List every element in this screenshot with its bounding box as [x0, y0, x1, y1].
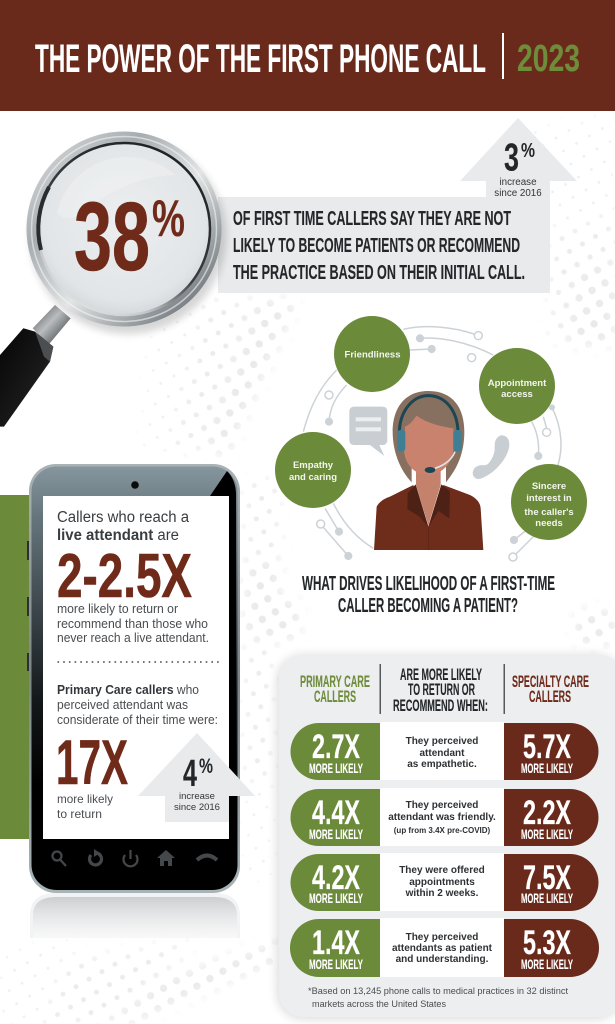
footnote: [308, 986, 569, 1009]
circle: sincere interest: Sincere: [532, 481, 566, 492]
icon: magnifying glass with 38 percent: %: [152, 190, 185, 248]
face: [404, 416, 453, 475]
header banner: [0, 0, 615, 111]
circle: appointment access: Appointment: [488, 378, 547, 389]
row: friendly: (up from 3.4X pre-COVID): [394, 826, 491, 835]
phone text: live attendant: Callers who reach a: [57, 509, 189, 526]
circle: appointment access: access: [501, 389, 533, 400]
circle: appointment access: [479, 348, 555, 424]
row: patient and understanding: MORE LIKELY: [309, 957, 363, 972]
icon: search: [52, 852, 66, 866]
phone text: live attendant: recommend than those who: [57, 617, 208, 631]
column header: specialty care callers: [512, 672, 589, 706]
phone navigation icons: [52, 849, 217, 866]
column header: primary care callers: PRIMARY CARE: [300, 672, 370, 691]
phone text: 17X primary care: 17X: [56, 728, 128, 798]
arrow: 3 percent increase since 2016: 3: [504, 136, 519, 180]
row: patient and understanding: attendants as patient: [392, 943, 493, 954]
heading: what drives likelihood: [302, 573, 555, 617]
collar: [407, 484, 428, 527]
year: 2023: [517, 38, 580, 80]
arrow: 4 percent increase since 2016: since 2016: [174, 802, 220, 813]
row: friendly: [290, 788, 598, 846]
arrow: 4 percent increase since 2016: %: [199, 755, 213, 778]
row: appointments: MORE LIKELY: [309, 891, 363, 906]
row: appointments: appointments: [409, 877, 475, 888]
phone text: 17X primary care: Primary Care callers who: [57, 683, 199, 697]
row: patient and understanding: and understanding.: [396, 954, 489, 965]
icon: power: [123, 850, 138, 866]
row: appointments: They were offered: [399, 865, 485, 876]
shirt: [374, 485, 483, 550]
row: friendly: 2.2X: [523, 794, 571, 832]
row: friendly: attendant was friendly.: [388, 812, 496, 823]
arrow: 3 percent increase since 2016: since 2016: [494, 188, 542, 199]
phone text: 17X primary care: considerate of their time were:: [57, 713, 218, 727]
row: patient and understanding: 1.4X: [312, 924, 360, 962]
arrow: 4 percent increase since 2016: [138, 733, 255, 822]
footnote: markets across the United States: [312, 999, 446, 1009]
circuit lines: [303, 327, 561, 561]
column header: more likely when: TO RETURN OR: [408, 680, 475, 699]
circle: empathy and caring: and caring: [289, 472, 337, 483]
panel: 38 percent statement strip: [218, 197, 550, 293]
footnote: *Based on 13,245 phone calls to medical practices in 32 distinct: [308, 986, 569, 996]
phone text: live attendant: never reach a live attendant.: [57, 631, 209, 645]
row: patient and understanding: 5.3X: [523, 924, 571, 962]
row: appointments: MORE LIKELY: [521, 891, 573, 906]
arrow: 4 percent increase since 2016: increase: [179, 791, 215, 802]
arrow: 4 percent increase since 2016: 4: [183, 753, 197, 795]
icon: telephone handset: [473, 435, 509, 479]
hair: [393, 391, 464, 482]
row: friendly: They perceived: [406, 800, 478, 811]
person with headset: [374, 391, 483, 550]
phone text: live attendant: live attendant are: [57, 527, 179, 544]
phone reflection: [30, 893, 240, 938]
phone text: live attendant: more likely to return or: [57, 602, 178, 616]
column header: primary care callers: CALLERS: [314, 687, 356, 706]
row: empathetic: 2.7X: [312, 728, 360, 766]
diagram: what drives likelihood: [275, 316, 587, 561]
arrow: 3 percent increase since 2016: %: [521, 140, 535, 162]
phone text: live attendant: 2-2.5X: [57, 542, 192, 611]
phone text: live attendant: [57, 509, 209, 645]
column header: primary care callers: [300, 672, 370, 706]
row: empathetic: They perceived: [406, 736, 478, 747]
column header: more likely when: [393, 665, 488, 715]
row: empathetic: MORE LIKELY: [521, 761, 573, 776]
magnifier handle: [0, 305, 71, 427]
icon: magnifying glass with 38 percent: [0, 132, 226, 427]
column header: specialty care callers: CALLERS: [529, 687, 571, 706]
panel: primary vs specialty comparison: [277, 655, 615, 1019]
row: friendly: 4.4X: [312, 794, 360, 832]
column header: more likely when: RECOMMEND WHEN:: [393, 696, 488, 715]
phone text: 17X primary care: perceived attendant was: [57, 698, 188, 712]
icon: home: [157, 850, 175, 866]
row: empathetic: MORE LIKELY: [309, 761, 363, 776]
circle: empathy and caring: Empathy: [293, 460, 334, 471]
row: appointments: 7.5X: [523, 859, 571, 897]
row: appointments: [290, 853, 598, 911]
circle: friendliness: Friendliness: [345, 350, 400, 360]
row: empathetic: 5.7X: [523, 728, 571, 766]
headset: [399, 396, 458, 432]
row: empathetic: attendant: [420, 748, 465, 759]
phone: [27, 464, 255, 893]
phone text: 17X primary care: to return: [57, 807, 102, 821]
circle: empathy and caring: [275, 432, 351, 508]
row: appointments: within 2 weeks.: [405, 888, 479, 899]
row: friendly: MORE LIKELY: [521, 827, 573, 842]
phone text: 17X primary care: [56, 683, 218, 821]
circle: friendliness: [334, 316, 410, 392]
circle: sincere interest: the caller's: [524, 507, 574, 518]
icon: refresh: [90, 849, 102, 865]
arrow: 3 percent increase since 2016: increase: [499, 177, 537, 188]
icon: chat bubble: [349, 407, 387, 456]
row: empathetic: as empathetic.: [407, 759, 477, 770]
row: patient and understanding: MORE LIKELY: [521, 957, 573, 972]
circle: sincere interest: [511, 464, 587, 540]
row: empathetic: [290, 722, 598, 780]
circle: sincere interest: needs: [535, 518, 563, 529]
neck: [416, 467, 441, 526]
big number 38 percent: 38: [74, 182, 150, 291]
icon: hang up: [197, 856, 217, 860]
arrow: 3 percent increase since 2016: [460, 118, 577, 199]
row: patient and understanding: [290, 918, 599, 977]
column header: more likely when: ARE MORE LIKELY: [400, 665, 482, 684]
green side band: [0, 495, 32, 839]
row: friendly: MORE LIKELY: [309, 827, 363, 842]
row: appointments: 4.2X: [312, 859, 360, 897]
circle: sincere interest: interest in: [526, 493, 572, 504]
row: patient and understanding: They perceived: [406, 932, 478, 943]
statement text: [233, 207, 525, 284]
phone text: 17X primary care: more likely: [57, 792, 113, 806]
